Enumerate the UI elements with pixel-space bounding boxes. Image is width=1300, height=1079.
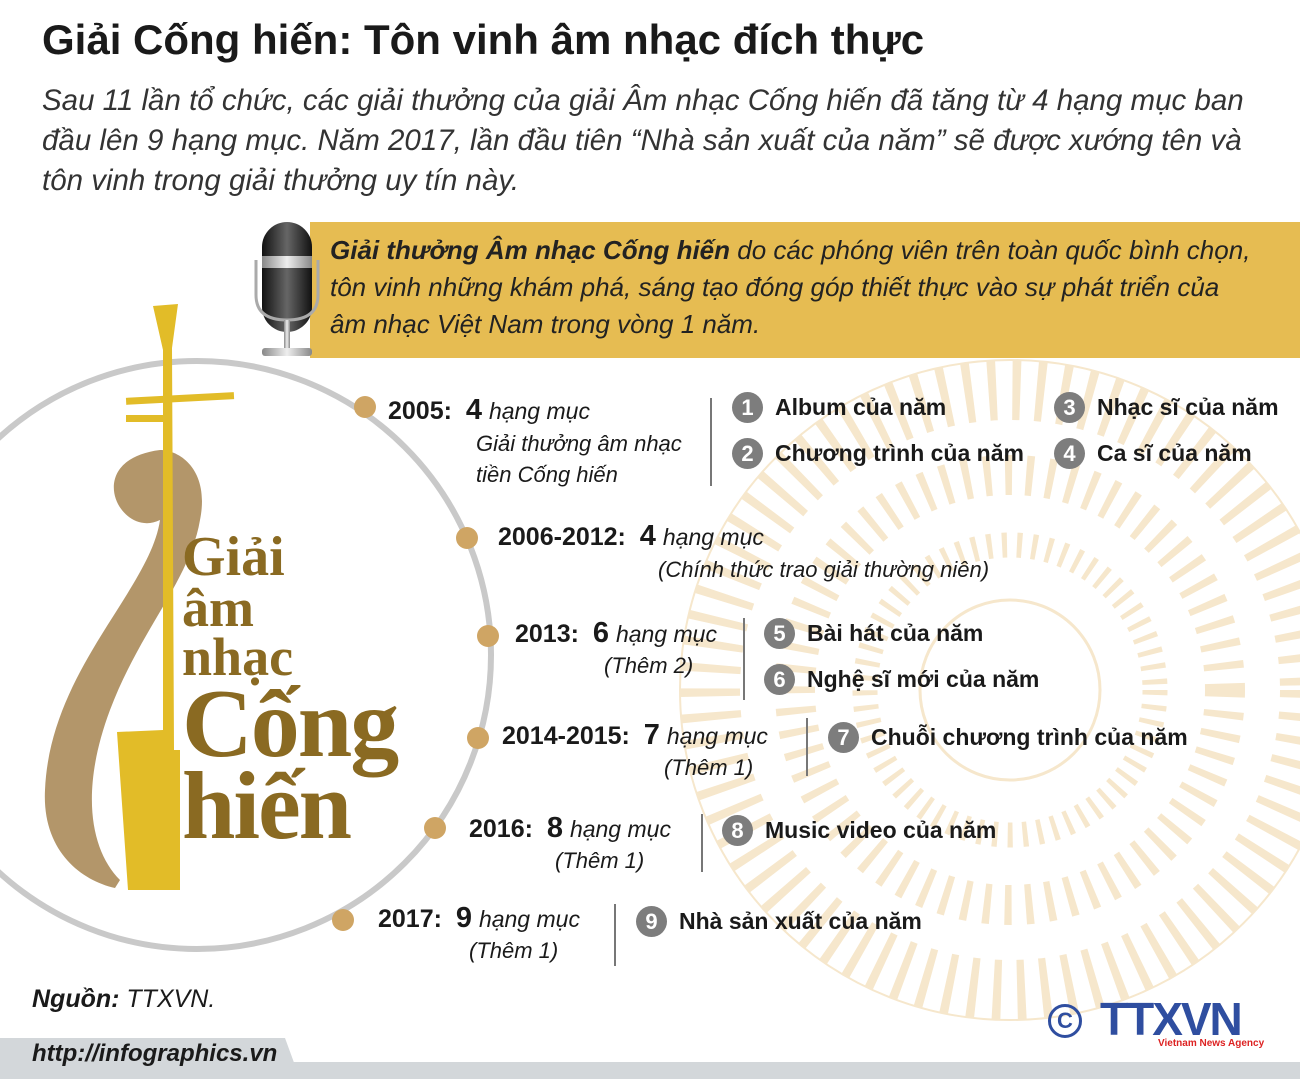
text: Nhà sản xuất của năm bbox=[679, 908, 922, 934]
logo: TTXVN: C bbox=[1057, 1008, 1073, 1033]
text: Giải thưởng âm nhạc bbox=[476, 431, 682, 456]
row 2005: 2005: 4 hạng mục bbox=[388, 394, 590, 426]
text: 9 bbox=[645, 909, 658, 934]
text: (Thêm 1) bbox=[555, 848, 644, 873]
logo: TTXVN bbox=[1048, 993, 1264, 1049]
row 2013: 2013: 6 hạng mục bbox=[515, 617, 717, 649]
text: Album của năm bbox=[775, 394, 946, 420]
intro text: Sau 11 lần tổ chức, các giải thưởng của giải Âm nhạc Cống hiến đã tăng từ 4 hạng mục ban bbox=[42, 84, 1244, 117]
text: Nghệ sĩ mới của năm bbox=[807, 666, 1039, 692]
row 2016: 2016: 8 hạng mục bbox=[469, 812, 671, 844]
text: Chương trình của năm bbox=[775, 440, 1024, 466]
text: Ca sĩ của năm bbox=[1097, 440, 1252, 466]
text: 8 bbox=[731, 818, 744, 843]
gold banner: tôn vinh những khám phá, sáng tạo đóng góp thiết thực vào sự phát triển của bbox=[330, 272, 1219, 302]
text: (Thêm 2) bbox=[604, 653, 693, 678]
row 2014-2015: 2014-2015: 7 hạng mục bbox=[502, 719, 768, 751]
text: 1 bbox=[741, 395, 754, 420]
intro text: đầu lên 9 hạng mục. Năm 2017, lần đầu tiên “Nhà sản xuất của năm” sẽ được xướng tên và bbox=[42, 124, 1242, 157]
logo text: hiến bbox=[182, 752, 350, 859]
gold banner bbox=[310, 222, 1300, 358]
logo text: Cống bbox=[182, 670, 397, 778]
text: tiền Cống hiến bbox=[476, 462, 618, 487]
text: http://infographics.vn bbox=[32, 1040, 277, 1067]
text: Chuỗi chương trình của năm bbox=[871, 724, 1188, 750]
text: (Thêm 1) bbox=[664, 755, 753, 780]
text: 6 bbox=[773, 667, 786, 692]
logo text: nhạc bbox=[182, 627, 293, 687]
source: Nguồn: TTXVN. bbox=[32, 985, 215, 1013]
gold banner: âm nhạc Việt Nam trong vòng 1 năm. bbox=[330, 309, 760, 339]
logo: TTXVN: Vietnam News Agency bbox=[1158, 1038, 1264, 1049]
icon: microphone bbox=[254, 222, 320, 356]
gold banner: Giải thưởng Âm nhạc Cống hiến do các phóng viên trên toàn quốc bình chọn, bbox=[330, 235, 1250, 265]
intro text: tôn vinh trong giải thưởng uy tín này. bbox=[42, 164, 519, 197]
text: 3 bbox=[1063, 395, 1076, 420]
text: (Chính thức trao giải thường niên) bbox=[658, 557, 989, 582]
logo text: Giải bbox=[182, 526, 285, 588]
gray circle bbox=[0, 361, 491, 949]
timeline dots bbox=[354, 396, 376, 418]
text: 7 bbox=[837, 725, 850, 750]
row 2006-2012: 2006-2012: 4 hạng mục bbox=[498, 520, 764, 552]
title: Giải Cống hiến: Tôn vinh âm nhạc đích thực bbox=[42, 16, 924, 63]
text: 4 bbox=[1063, 441, 1076, 466]
text: Music video của năm bbox=[765, 817, 996, 843]
text: Nhạc sĩ của năm bbox=[1097, 394, 1279, 420]
text: 5 bbox=[773, 621, 786, 646]
logo: TTXVN: TTXVN bbox=[1100, 993, 1241, 1045]
logo text: âm bbox=[182, 578, 254, 638]
intro text bbox=[42, 84, 1244, 197]
logo: instrument bbox=[44, 304, 234, 890]
text: Bài hát của năm bbox=[807, 620, 983, 646]
footer bbox=[0, 1062, 1300, 1079]
text: 2 bbox=[741, 441, 754, 466]
text: (Thêm 1) bbox=[469, 938, 558, 963]
logo text bbox=[182, 526, 398, 859]
row 2017: 2017: 9 hạng mục bbox=[378, 902, 580, 934]
